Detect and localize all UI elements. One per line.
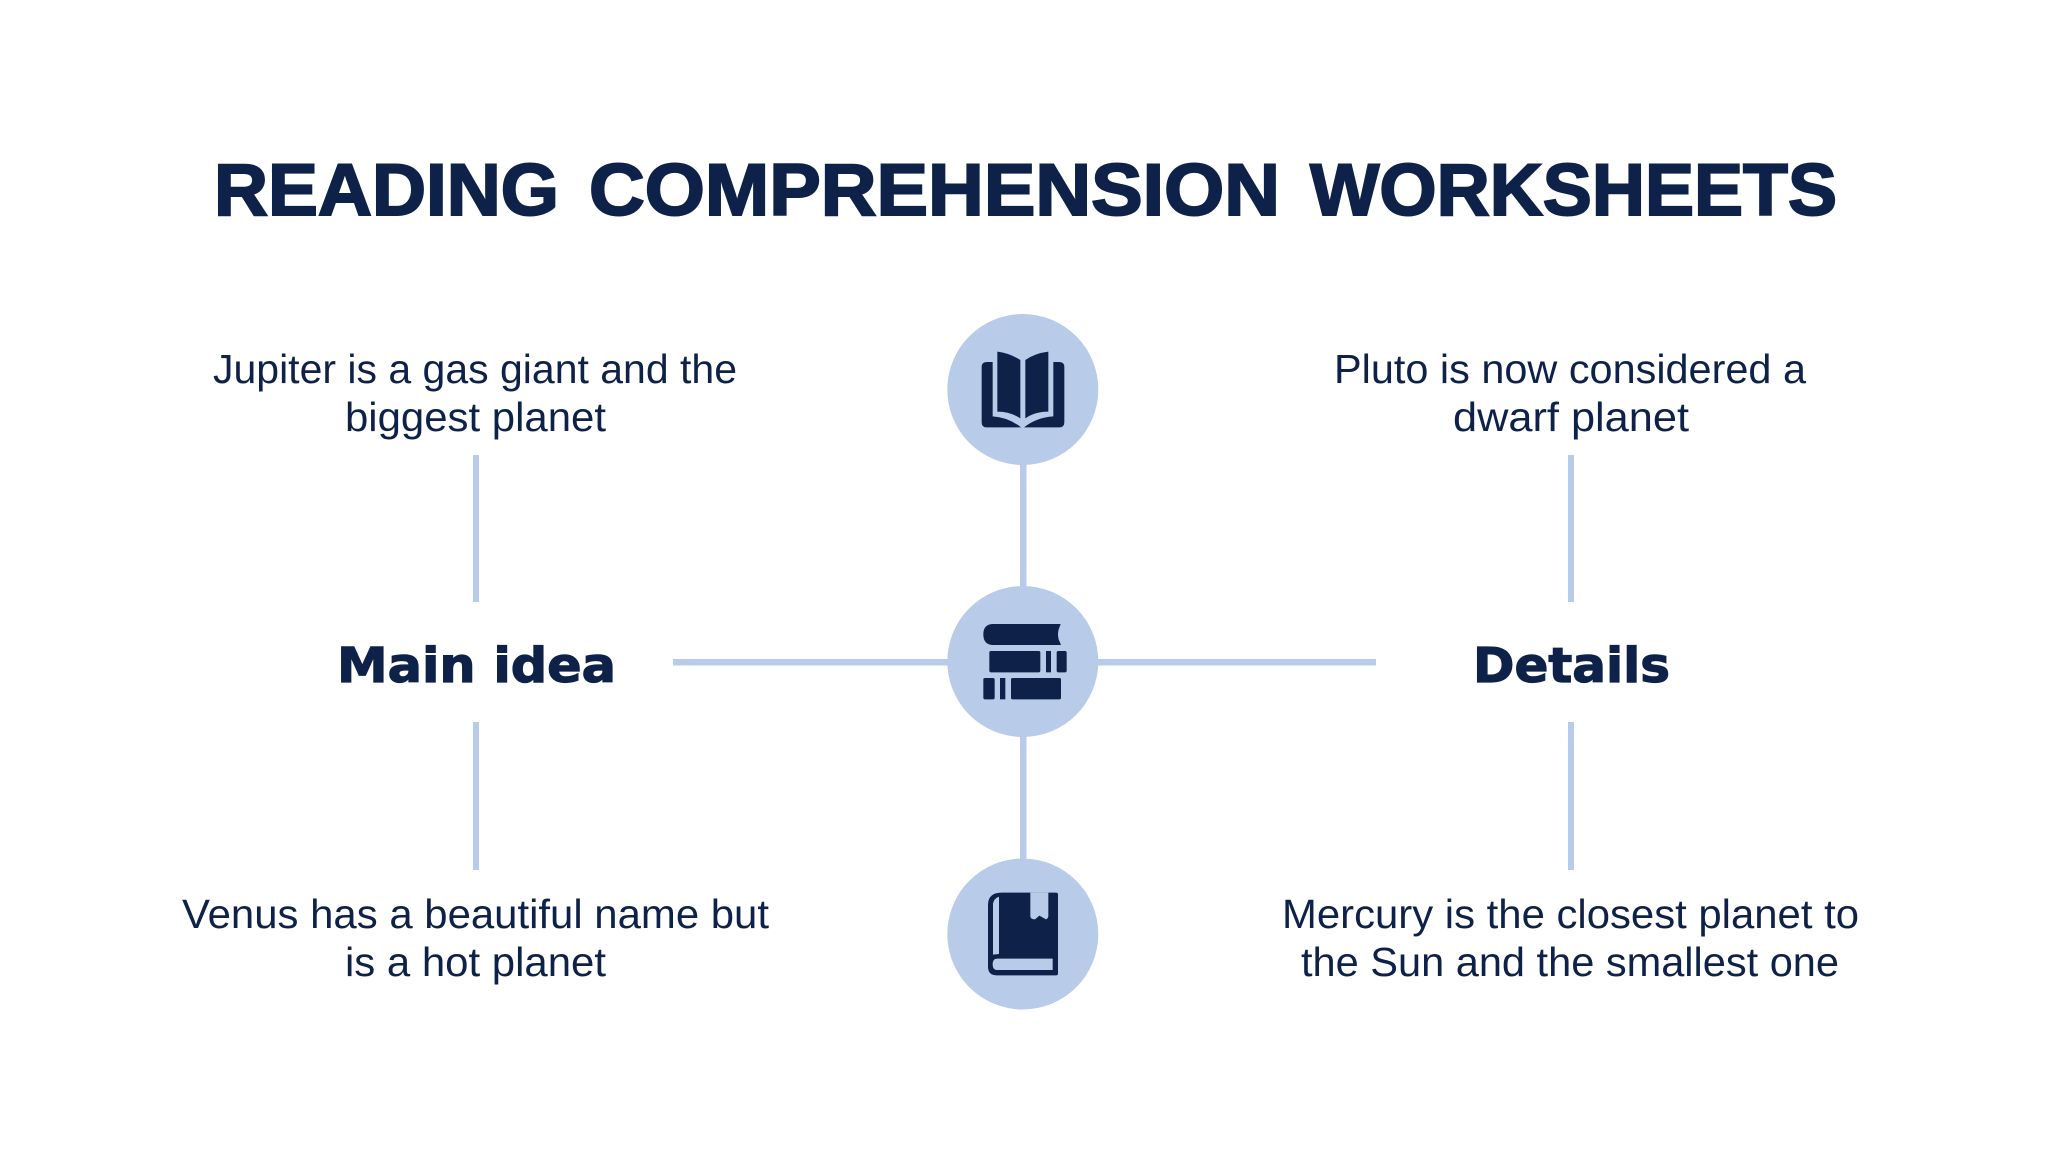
text block: Mercury: Mercury is the closest planet to [1282, 891, 1859, 937]
title: WORKSHEETS [1310, 150, 1837, 231]
text block: Jupiter: biggest planet [345, 394, 607, 440]
text block: Pluto [1334, 346, 1806, 440]
text block: Venus: is a hot planet [345, 939, 607, 985]
title: COMPREHENSION [589, 150, 1280, 231]
icon: closed book with bookmark [947, 858, 1098, 1010]
title [214, 150, 1837, 231]
text block: Venus: Venus has a beautiful name but [182, 891, 770, 937]
text block: Jupiter [213, 346, 737, 440]
text block: Jupiter: Jupiter is a gas giant and the [213, 346, 737, 392]
heading: Main idea: Main idea [337, 638, 616, 694]
icon: open book [947, 314, 1098, 465]
heading: Details: Details [1473, 638, 1670, 694]
title: READING [214, 150, 559, 231]
text block: Pluto: dwarf planet [1453, 394, 1690, 440]
text block: Mercury [1282, 891, 1859, 985]
text block: Pluto: Pluto is now considered a [1334, 346, 1806, 392]
icon: stack of books [947, 586, 1098, 737]
text block: Mercury: the Sun and the smallest one [1301, 939, 1839, 985]
connector lines [473, 455, 1574, 940]
text block: Venus [182, 891, 770, 985]
